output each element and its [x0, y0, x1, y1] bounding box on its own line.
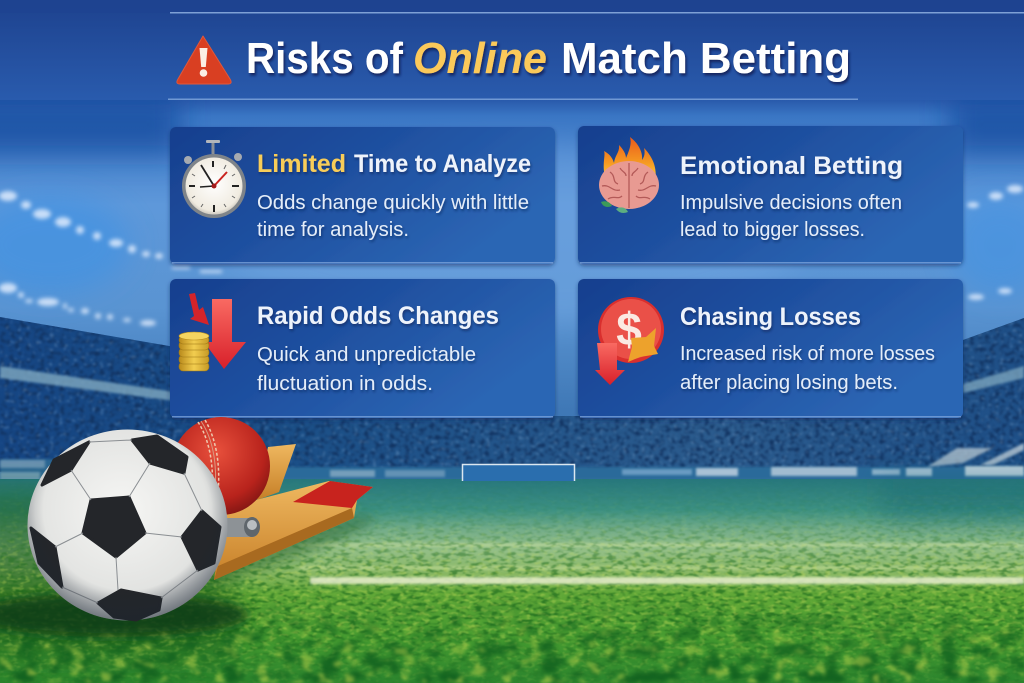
body text: Odds change quickly with little	[257, 192, 529, 214]
white pitch line	[310, 577, 1024, 584]
icon: falling odds arrows and coins	[179, 293, 246, 371]
body text: lead to bigger losses.	[680, 219, 865, 241]
icon: flaming brain	[599, 137, 659, 213]
body text	[680, 192, 902, 241]
title: Online	[413, 34, 547, 83]
heading: Time to Analyze	[354, 150, 531, 178]
heading	[257, 150, 531, 178]
icon: warning triangle	[177, 36, 231, 84]
stadium background	[0, 100, 1024, 479]
body text: after placing losing bets.	[680, 372, 898, 394]
body text	[680, 343, 935, 394]
right stand ad ribbon	[963, 366, 1024, 393]
crowd stands	[0, 317, 1024, 472]
floodlight strings	[0, 185, 1023, 326]
icon: dollar coin, star and arrow: $	[616, 303, 642, 355]
icon: cricket bat	[202, 444, 378, 588]
icon: soccer ball	[28, 430, 228, 620]
body text	[257, 344, 476, 395]
heading: Limited	[257, 150, 346, 178]
panel: limited time to analyze	[170, 127, 555, 264]
panel: rapid odds changes	[170, 279, 555, 418]
icon: dollar coin, star and arrow	[595, 297, 664, 385]
icon: cricket ball	[172, 417, 270, 515]
title	[246, 34, 851, 83]
heading: Rapid Odds Changes	[257, 302, 499, 330]
panel: emotional betting	[578, 126, 963, 264]
goal	[462, 464, 575, 481]
heading: Emotional Betting	[680, 152, 903, 180]
title: Match Betting	[561, 34, 851, 83]
body text	[257, 192, 529, 241]
panel: chasing losses	[578, 279, 963, 418]
pitch	[0, 478, 1024, 683]
title: Risks of	[246, 34, 403, 83]
icon: stopwatch	[182, 140, 246, 218]
heading: Chasing Losses	[680, 303, 861, 331]
body text: Impulsive decisions often	[680, 192, 902, 214]
advertising boards	[0, 443, 1024, 482]
left stand ad ribbon	[0, 366, 175, 401]
ball shadow	[0, 593, 250, 637]
body text: fluctuation in odds.	[257, 373, 433, 395]
body text: time for analysis.	[257, 219, 409, 241]
body text: Increased risk of more losses	[680, 343, 935, 365]
body text: Quick and unpredictable	[257, 344, 476, 366]
title band	[0, 0, 1024, 100]
